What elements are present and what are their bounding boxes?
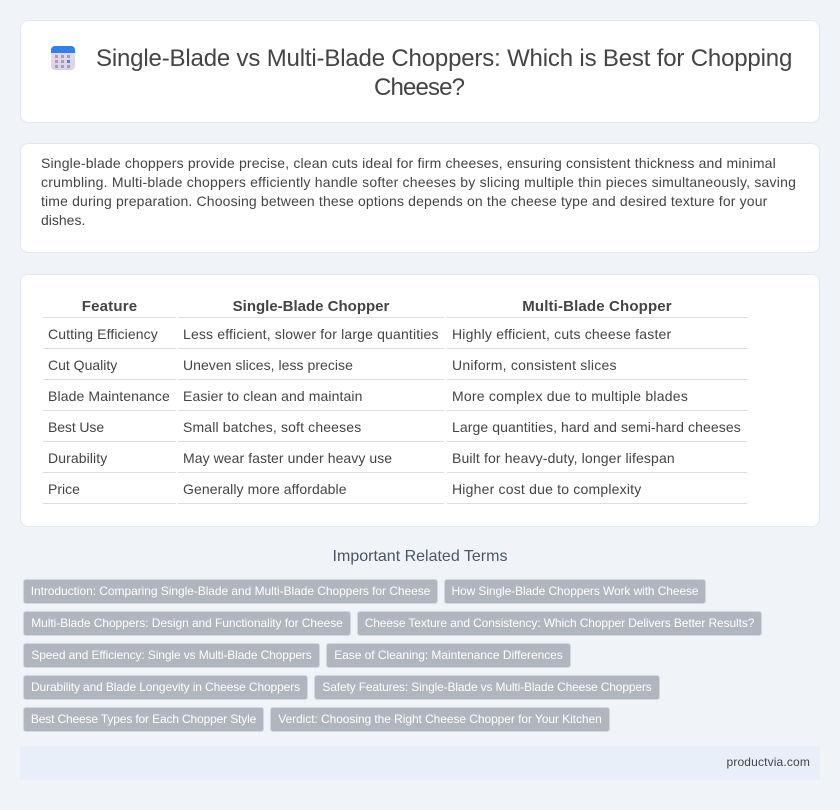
row: price (48, 481, 642, 497)
comparison table (43, 298, 747, 504)
title: Single-Blade vs Multi-Blade Choppers: Which is Best for Chopping (96, 45, 792, 72)
row: durability: Built for heavy-duty, longer lifespan (452, 450, 675, 466)
icon: calendar (51, 46, 75, 70)
row: best use (48, 419, 741, 435)
related term tags: Speed and Efficiency: Single vs Multi-Blade Choppers (31, 648, 312, 662)
table header: Multi-Blade Chopper (522, 298, 672, 315)
panel: header (20, 20, 820, 123)
row: cutting efficiency (48, 326, 671, 342)
row: blade maintenance: Blade Maintenance (48, 388, 170, 404)
table header: Single-Blade Chopper (233, 298, 389, 315)
row: durability (48, 450, 675, 466)
related term tags: Safety Features: Single-Blade vs Multi-Blade Cheese Choppers (322, 680, 652, 694)
related term tags (23, 579, 762, 732)
row: cut quality: Cut Quality (48, 357, 117, 373)
related term tags: Introduction: Comparing Single-Blade and Multi-Blade Choppers for Cheese (31, 584, 430, 598)
row: cut quality (48, 357, 617, 373)
table header: Feature (82, 298, 137, 315)
panel: introduction (20, 143, 820, 253)
row: durability: May wear faster under heavy use (183, 450, 392, 466)
row: blade maintenance: More complex due to multiple blades (452, 388, 688, 404)
row: price: Higher cost due to complexity (452, 481, 641, 497)
related term tags: Cheese Texture and Consistency: Which Chopper Delivers Better Results? (365, 616, 754, 630)
panel: comparison table (20, 274, 820, 527)
row: cutting efficiency: Highly efficient, cuts cheese faster (452, 326, 671, 342)
row: cut quality: Uniform, consistent slices (452, 357, 617, 373)
text block: introduction: crumbling. Multi-blade choppers efficiently handle softer cheeses by slicing multiple thin pieces simultaneously, saving (41, 174, 796, 190)
row: best use: Large quantities, hard and semi-hard cheeses (452, 419, 741, 435)
related term tags: How Single-Blade Choppers Work with Cheese (451, 584, 699, 598)
footer bar (20, 746, 820, 780)
row: best use: Best Use (48, 419, 104, 435)
row: best use: Small batches, soft cheeses (183, 419, 361, 435)
footer source: productvia.com (727, 755, 810, 769)
related term tags: Verdict: Choosing the Right Cheese Chopper for Your Kitchen (278, 712, 602, 726)
text block: introduction (41, 155, 796, 228)
row: durability: Durability (48, 450, 107, 466)
heading: related terms: Important Related Terms (333, 548, 507, 565)
text block: introduction: dishes. (41, 212, 85, 228)
row: cut quality: Uneven slices, less precise (183, 357, 353, 373)
related term tags: Durability and Blade Longevity in Cheese Choppers (31, 680, 300, 694)
row: blade maintenance: Easier to clean and maintain (183, 388, 362, 404)
related term tags: Ease of Cleaning: Maintenance Differences (334, 648, 563, 662)
title: Cheese? (374, 74, 464, 101)
related term tags: Best Cheese Types for Each Chopper Style (31, 712, 256, 726)
text block: introduction: Single-blade choppers provide precise, clean cuts ideal for firm cheeses, ensuring consistent thickness and minimal (41, 155, 776, 171)
table header (82, 298, 672, 315)
row: blade maintenance (48, 388, 688, 404)
row: price: Generally more affordable (183, 481, 347, 497)
row: price: Price (48, 481, 80, 497)
row: cutting efficiency: Cutting Efficiency (48, 326, 158, 342)
related term tags: Multi-Blade Choppers: Design and Functionality for Cheese (31, 616, 343, 630)
text block: introduction: time during preparation. Choosing between these options depends on the cheese type and desired texture for your (41, 193, 767, 209)
title (96, 45, 792, 101)
row: cutting efficiency: Less efficient, slower for large quantities (183, 326, 439, 342)
